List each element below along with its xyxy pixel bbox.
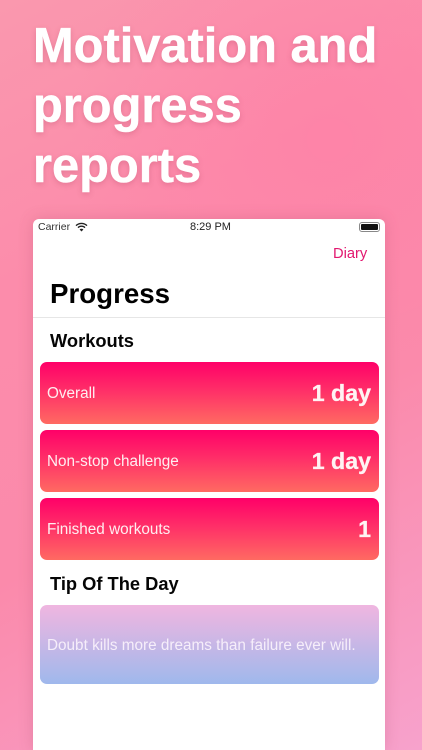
divider [33,317,385,318]
title [33,19,377,194]
title: progress [33,79,242,133]
status bar carrier: Carrier [38,221,70,233]
card: tip [40,605,379,684]
title: reports [33,139,201,193]
label: Non-stop challenge [47,453,179,470]
diary link: Diary [333,246,367,262]
value: 1 [358,516,371,542]
label: Overall [47,385,95,402]
card: overall [40,362,379,424]
card: finished workouts [40,498,379,560]
status bar time: 8:29 PM [190,221,231,233]
tip text: Doubt kills more dreams than failure ever will. [47,637,356,654]
value: 1 day [312,448,371,474]
card: non-stop challenge [40,430,379,492]
label: Finished workouts [47,521,170,538]
icon: battery [359,222,380,232]
title: Motivation and [33,19,377,73]
value: 1 day [312,380,371,406]
heading: tip of the day: Tip Of The Day [50,573,179,594]
heading: progress: Progress [50,278,170,309]
heading: workouts: Workouts [50,330,134,351]
panel: phone screen [33,219,385,750]
icon: wifi [76,222,88,232]
